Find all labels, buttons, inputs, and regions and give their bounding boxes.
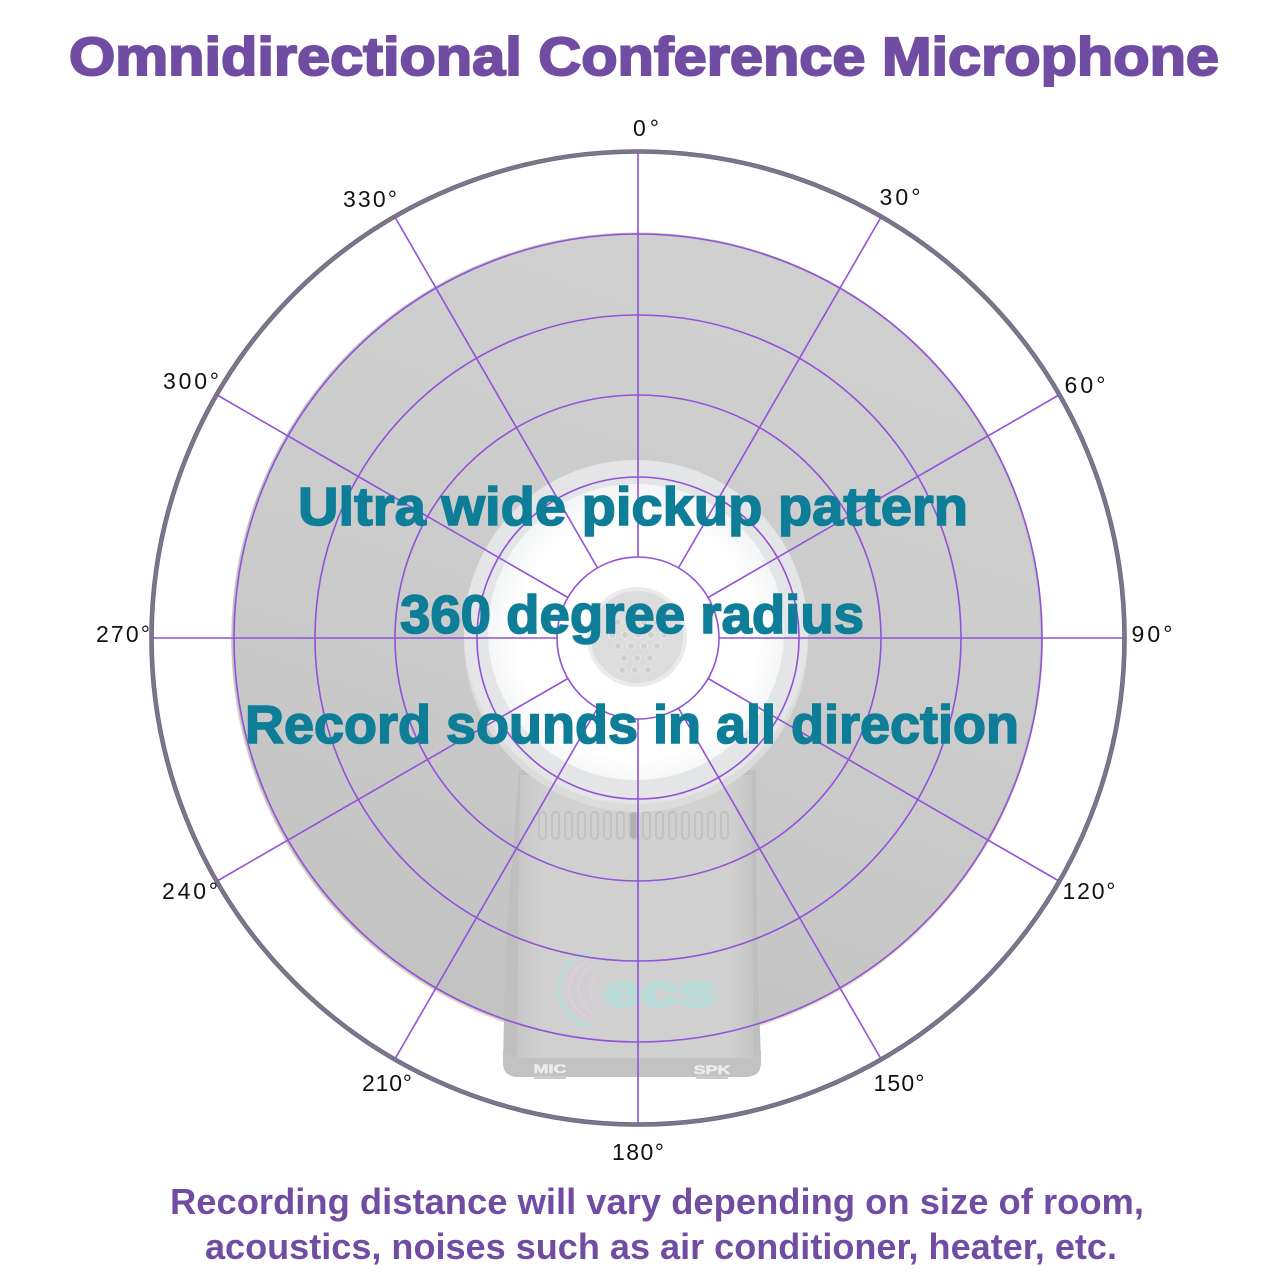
microphone photo [231,232,1043,1079]
angle labels: 30° [880,184,920,210]
MIC label: MIC [534,1062,567,1076]
angle labels: 300° [163,368,219,394]
polar grid [152,152,1124,1124]
angle labels: 90° [1132,621,1172,647]
center callout text [245,477,1019,755]
outer ring [152,152,1124,1124]
angle labels: 240° [162,878,218,904]
footer note: acoustics, noises such as air conditioner, heater, etc. [205,1226,1117,1267]
angle labels: 330° [343,186,397,212]
title: Omnidirectional Conference Microphone [69,27,1219,87]
angle labels: 210° [362,1070,412,1096]
microphone stem [503,770,761,1079]
SPK label: SPK [694,1063,731,1077]
ecs logo [559,953,716,1026]
center callout text: Ultra wide pickup pattern [298,477,968,537]
footer note: Recording distance will vary depending on size of room, [170,1181,1144,1222]
angle labels: 120° [1062,878,1116,904]
disc body [231,233,1043,1045]
center callout text: 360 degree radius [400,585,864,645]
center dish [464,468,808,812]
footer note [170,1181,1144,1267]
angle labels: 180° [612,1139,664,1165]
vent slots [539,812,728,839]
center callout text: Record sounds in all direction [245,695,1019,755]
angle labels: 270° [96,621,150,647]
angle labels: 150° [874,1070,924,1096]
angle labels: 60° [1064,372,1106,398]
angle labels [96,115,1172,1165]
ecs logo: ecs [604,967,716,1016]
microphone grille [587,587,687,687]
angle labels: 0° [633,115,659,141]
